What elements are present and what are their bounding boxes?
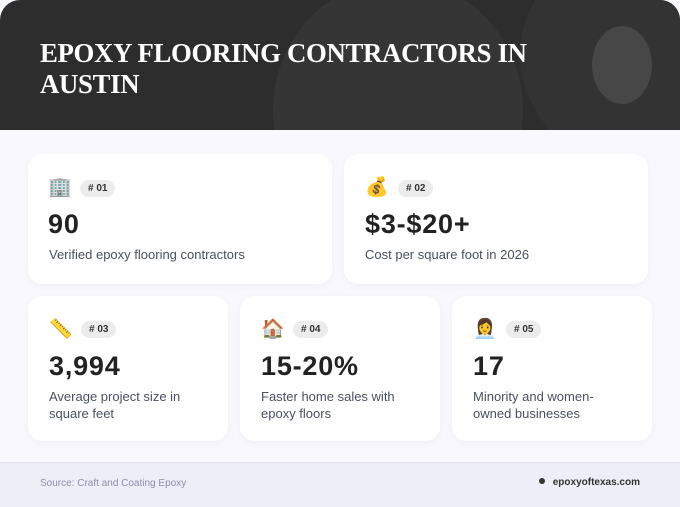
value 90: 90	[48, 209, 80, 239]
label: epoxy floors	[261, 406, 331, 421]
label	[261, 389, 395, 421]
value: 3,994	[49, 351, 121, 381]
card 2	[344, 154, 648, 284]
label	[473, 389, 594, 421]
badge 02	[398, 180, 433, 197]
label: Average project size in	[49, 389, 180, 404]
icon: building: 🏢	[48, 177, 72, 198]
icon: woman: 👩‍💼	[473, 319, 497, 340]
badge 04: # 04	[301, 324, 320, 335]
label	[49, 389, 180, 421]
value: $3-$20+	[365, 209, 470, 239]
label: square feet	[49, 406, 114, 421]
label: Verified epoxy flooring contractors	[49, 247, 245, 262]
badge 01	[80, 180, 115, 197]
badge 02: # 02	[406, 183, 425, 194]
website: epoxyoftexas.com	[553, 477, 640, 488]
source: Source: Craft and Coating Epoxy	[40, 478, 186, 489]
label: owned businesses	[473, 406, 580, 421]
value: 17	[473, 351, 505, 381]
card 5	[452, 296, 652, 441]
badge 05: # 05	[514, 324, 533, 335]
badge 03	[81, 321, 116, 338]
label: Faster home sales with	[261, 389, 395, 404]
icon: house: 🏠	[261, 319, 285, 340]
title: EPOXY FLOORING CONTRACTORS IN	[40, 38, 527, 68]
badge 01: # 01	[88, 183, 107, 194]
icon: money bag: 💰	[365, 177, 389, 198]
label: Minority and women-	[473, 389, 594, 404]
footer	[0, 462, 680, 507]
label: Cost per square foot in 2026	[365, 247, 529, 262]
badge 04	[293, 321, 328, 338]
value: 15-20%	[261, 351, 359, 381]
icon: ruler: 📏	[49, 319, 73, 340]
header	[0, 0, 680, 130]
badge 03: # 03	[89, 324, 108, 335]
card 1	[28, 154, 332, 284]
card 4	[240, 296, 440, 441]
badge 05	[506, 321, 541, 338]
card 3	[28, 296, 228, 441]
title	[40, 38, 527, 99]
title: AUSTIN	[40, 69, 139, 99]
